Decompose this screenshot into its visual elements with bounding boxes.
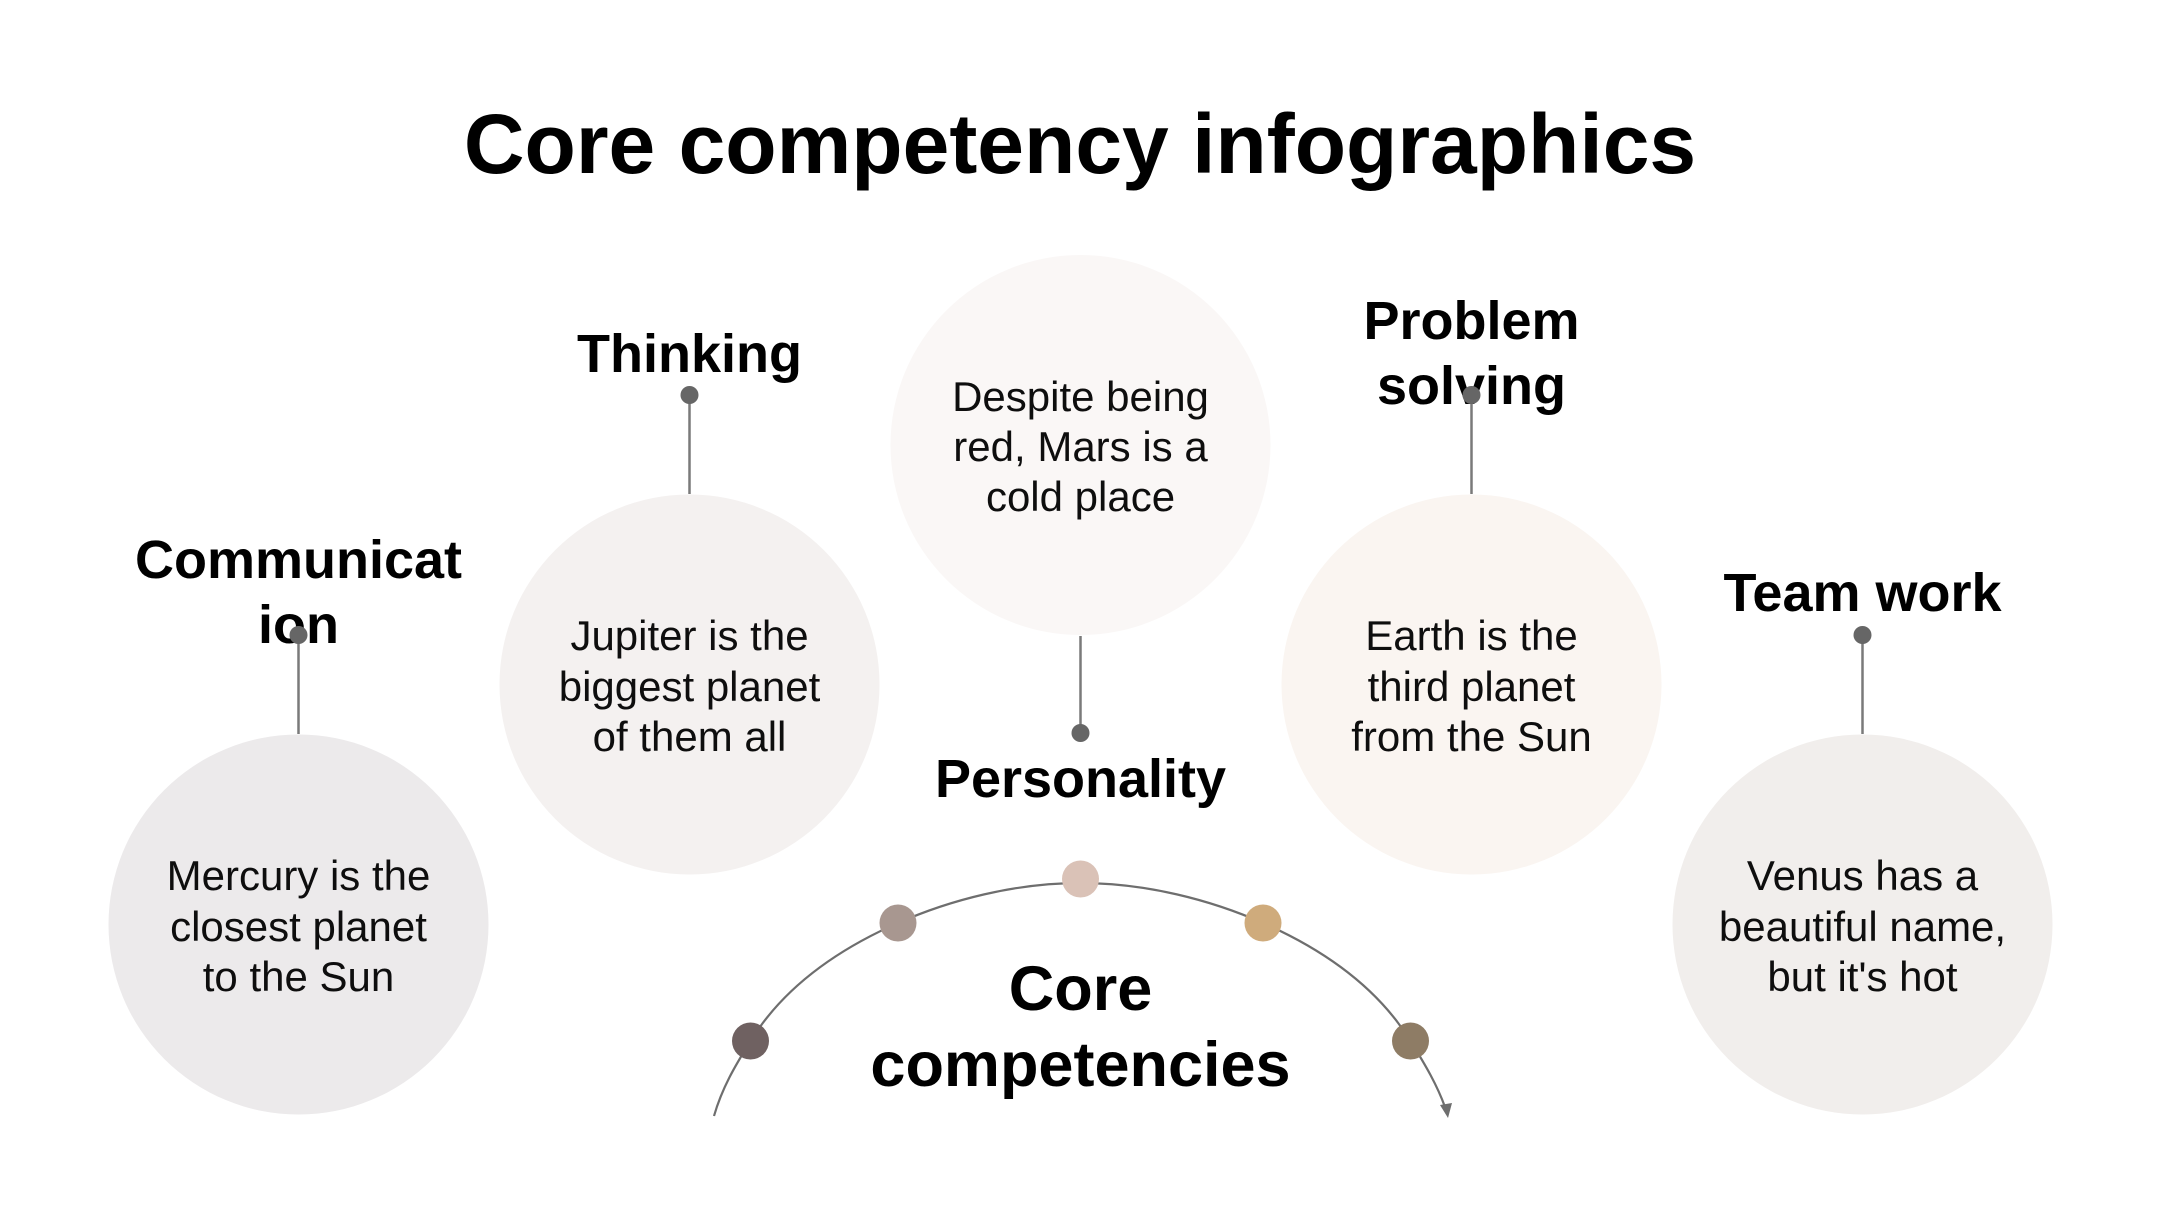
heading: personality: Personality (935, 749, 1226, 809)
text: earth: Earth is the (1365, 612, 1578, 659)
dot: arc point 4 (1244, 904, 1282, 942)
dot: arc point 3 (1062, 860, 1099, 898)
heading: problem solving: solving (1377, 356, 1566, 416)
dot: arc point 2 (880, 904, 916, 942)
heading: communication: Communicat (135, 530, 462, 590)
panel: problem solving (1282, 291, 1662, 874)
text: jupiter: of them all (593, 713, 786, 760)
heading: communication: ion (258, 595, 339, 655)
text: earth: from the Sun (1351, 713, 1592, 760)
text: mercury: Mercury is the (167, 852, 430, 899)
circle: earth (1282, 494, 1662, 874)
circle: mercury (108, 734, 488, 1114)
circle: jupiter (500, 494, 880, 874)
text: jupiter: biggest planet (559, 663, 821, 710)
connector: personality (1072, 636, 1090, 742)
panel: thinking (500, 324, 880, 874)
panel: team work (1672, 563, 2052, 1114)
connector: team work (1854, 626, 1872, 734)
text: mars: cold place (986, 473, 1175, 520)
arc with arrow (714, 883, 1452, 1118)
text: venus: but it's hot (1767, 953, 1958, 1000)
text: jupiter: Jupiter is the (570, 612, 809, 659)
text: venus: beautiful name, (1719, 903, 2006, 950)
dot: arc point 1 (732, 1022, 769, 1060)
dot: arc point 5 (1392, 1022, 1429, 1060)
circle: venus (1672, 734, 2052, 1114)
heading: thinking: Thinking (577, 324, 802, 384)
text: venus: Venus has a (1747, 852, 1979, 899)
heading: team work: Team work (1723, 563, 2003, 623)
connector: communication (290, 626, 308, 734)
connector: problem solving (1462, 386, 1480, 494)
panel: personality (890, 255, 1270, 809)
center label: Core (1009, 954, 1152, 1024)
circle: mars (890, 255, 1270, 635)
title: Core competency infographics (464, 97, 1696, 191)
text: mercury: closest planet (170, 903, 427, 950)
center label: competencies (870, 1030, 1291, 1100)
connector: thinking (680, 386, 698, 494)
text: mars: red, Mars is a (953, 423, 1208, 470)
panel: communication (108, 530, 488, 1114)
heading: problem solving: Problem (1363, 291, 1580, 351)
text: mars: Despite being (952, 373, 1209, 420)
text: earth: third planet (1368, 663, 1576, 710)
text: mercury: to the Sun (203, 953, 394, 1000)
